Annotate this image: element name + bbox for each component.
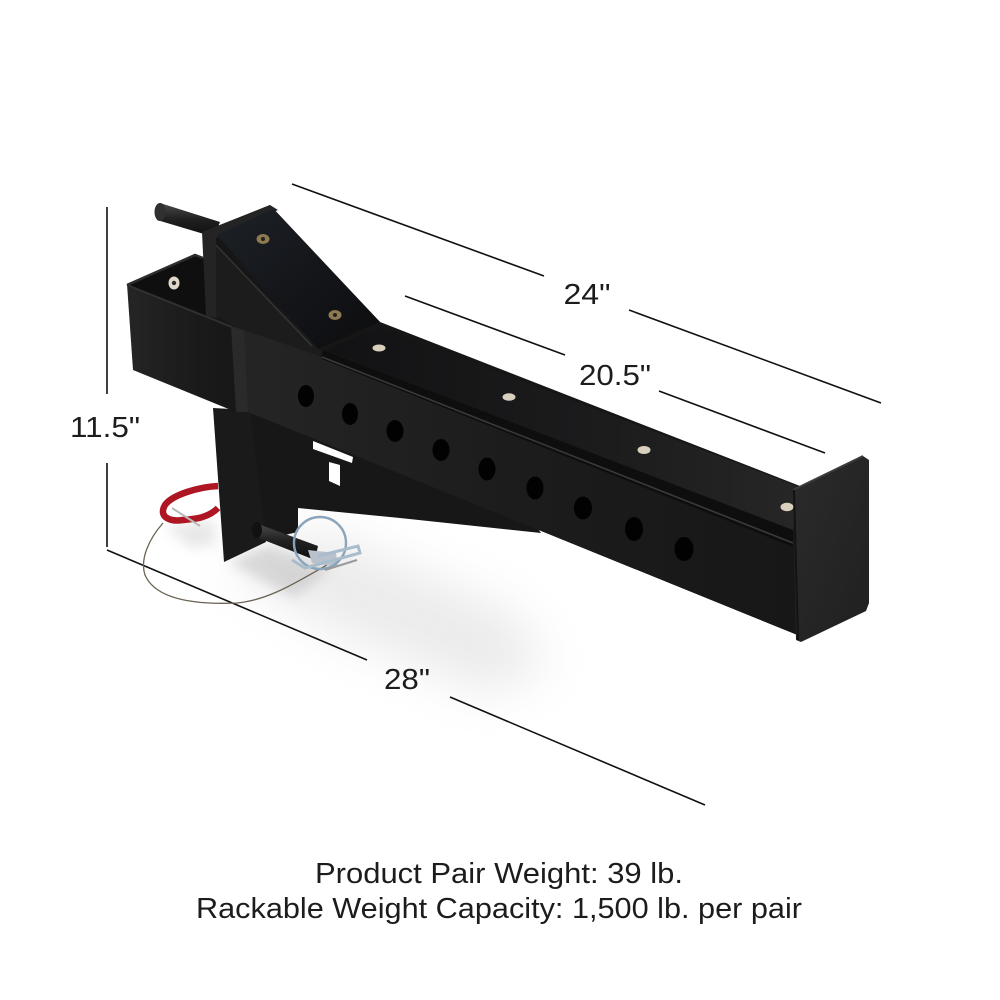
dimension: 20.5 inch length: 20.5"	[579, 360, 651, 392]
red pull ring and lanyard wire	[144, 486, 327, 603]
weight caption: Rackable Weight Capacity: 1,500 lb. per pair	[196, 893, 802, 925]
floor shadow	[165, 520, 550, 695]
logo cut-out: T	[313, 441, 353, 486]
weight caption	[196, 858, 802, 925]
dimension: 24 inch length	[292, 184, 881, 403]
pad bolt upper	[256, 234, 270, 244]
row of holes	[298, 385, 694, 561]
dimension: 28 inch length	[107, 550, 705, 805]
rear gusset plate	[245, 405, 541, 540]
main beam side face	[231, 326, 800, 636]
sleeve interior	[127, 255, 230, 327]
dimension: 24 inch length: 24"	[564, 279, 610, 311]
sleeve front face	[127, 255, 236, 412]
top hook pin	[154, 203, 220, 237]
sleeve bolt	[168, 276, 180, 290]
top plate of beam	[322, 327, 797, 547]
dimension: 20.5 inch length	[405, 296, 825, 453]
lower lock pin with linch clip	[252, 517, 360, 570]
weight caption: Product Pair Weight: 39 lb.	[315, 858, 683, 890]
angled rubber pad	[217, 209, 380, 349]
end cap plate	[793, 456, 869, 642]
dimension: 11.5 inch height: 11.5"	[70, 412, 140, 444]
body underlay joining the welded parts	[203, 205, 800, 636]
plate bolts	[372, 344, 794, 511]
dimension: 28 inch length: 28"	[384, 664, 430, 696]
vertical post plate	[213, 408, 266, 562]
upright frame and side triangle	[202, 205, 322, 360]
pad bolt lower	[328, 310, 342, 320]
